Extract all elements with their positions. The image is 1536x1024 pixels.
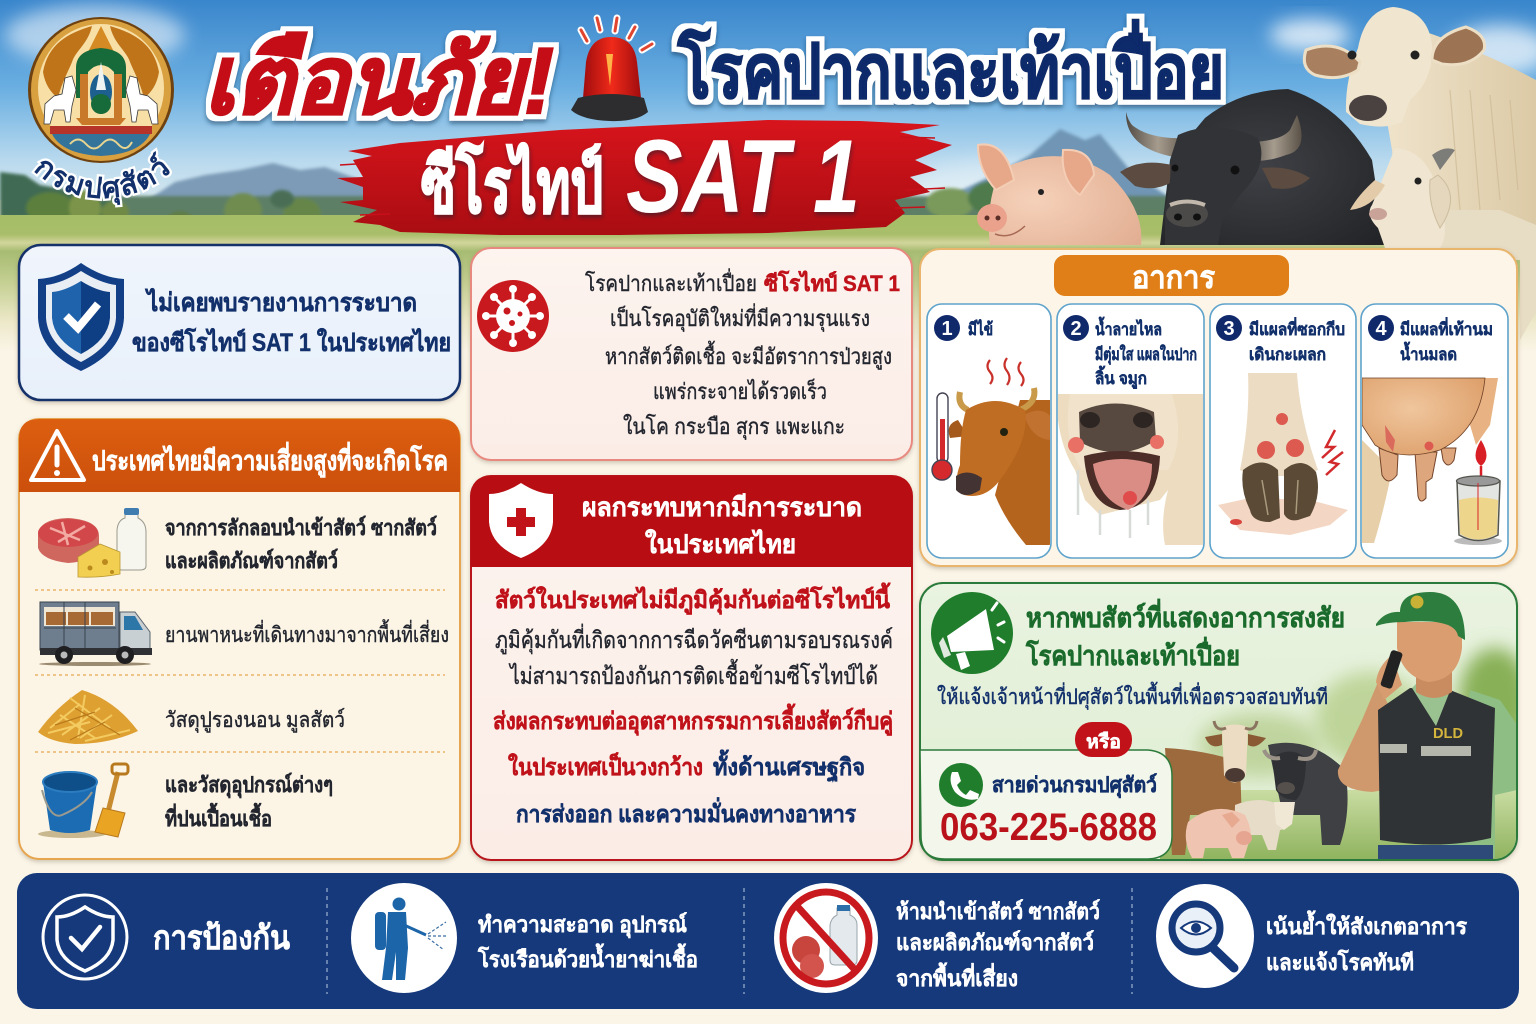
card: teat lesions and reduced milk: 4 <box>1375 318 1387 340</box>
risk header <box>19 419 460 492</box>
hotline sub-panel outline <box>920 750 1172 859</box>
text: not reported in Thailand <box>132 287 451 357</box>
icon: magnifier with eye <box>1156 884 1254 988</box>
text: bedding and manure: วัสดุปูรองนอน มูลสัตว์ <box>165 708 345 733</box>
title: warning headline <box>204 19 1224 133</box>
text: import ban <box>896 899 1100 991</box>
card: fever: มีไข้ <box>968 319 993 339</box>
icon: shield check in circle <box>43 895 127 979</box>
text: disease description <box>585 268 900 440</box>
goat <box>1350 148 1536 340</box>
icon: straw bedding <box>38 690 138 744</box>
banner text: SAT 1: SAT 1 <box>626 119 860 235</box>
card: teat lesions and reduced milk: น้ำนมลด <box>1400 341 1457 364</box>
card: salivation and mouth sores: ลิ้น จมูก <box>1095 365 1147 390</box>
title: disease name: โรคปากและเท้าเปื่อย <box>677 19 1224 113</box>
panel: report suspected animals <box>920 583 1531 860</box>
text: disease description: ในโค กระบือ สุกร แพะแกะ <box>623 414 845 440</box>
icon: virus <box>477 280 549 352</box>
impact header: ในประเทศไทย <box>645 528 796 559</box>
text: clean and disinfect: ทำความสะอาด อุปกรณ์ <box>478 912 687 939</box>
banner: red brush stroke with serotype <box>337 119 952 235</box>
text: no immunity: ไม่สามารถป้องกันการติดเชื้อข้ามซีโรไทป์ได้ <box>508 659 878 689</box>
card: teat lesions and reduced milk: มีแผลที่เท้านม <box>1400 317 1493 339</box>
cow <box>1165 721 1266 855</box>
text: disease description: หากสัตว์ติดเชื้อ จะมีอัตราการป่วยสูง <box>605 341 892 370</box>
card: hoof lesions: 3 <box>1223 318 1235 340</box>
officer on phone: DLD <box>1433 725 1463 742</box>
card: hoof lesions: เดินกะเผลก <box>1249 345 1326 364</box>
panel: symptoms <box>920 249 1517 566</box>
text: hotline label: สายด่วนกรมปศุสัตว์ <box>992 773 1157 799</box>
bottom bar: prevention <box>17 873 1519 1009</box>
text: not reported in Thailand: ของซีโรไทป์ SAT 1 ในประเทศไทย <box>132 327 451 357</box>
text: observe and report: และแจ้งโรคทันที <box>1266 949 1414 975</box>
impact header: ผลกระทบหากมีการระบาด <box>582 492 862 522</box>
text: smuggling: และผลิตภัณฑ์จากสัตว์ <box>165 548 338 573</box>
text: no immunity: สัตว์ในประเทศไม่มีภูมิคุ้มกันต่อซีโรไทป์นี้ <box>495 582 891 615</box>
text: no immunity <box>495 582 893 689</box>
text: suspected symptoms heading: โรคปากและเท้าเปื่อย <box>1025 636 1240 671</box>
pig <box>1186 809 1252 858</box>
illustration: officer and livestock in a meadow <box>1160 592 1531 860</box>
icon: blue shield with check <box>38 263 124 371</box>
text: observe and report <box>1266 910 1467 975</box>
card: hoof lesions: มีแผลที่ซอกกีบ <box>1249 317 1345 339</box>
icon: phone <box>939 763 983 807</box>
card: fever: 1 <box>941 318 953 340</box>
text: disease description: โรคปากและเท้าเปื่อย <box>585 268 757 296</box>
text: clean and disinfect <box>477 912 698 972</box>
text: import ban: ห้ามนำเข้าสัตว์ ซากสัตว์ <box>896 899 1100 924</box>
text: contaminated equipment: และวัสดุอุปกรณ์ต่างๆ <box>165 772 333 799</box>
icon: livestock truck <box>39 602 152 666</box>
card: salivation and mouth sores: มีตุ่มใส แผลในปาก <box>1095 344 1197 365</box>
buffalo <box>1264 743 1348 845</box>
title: warning headline: เตือนภัย! <box>204 28 554 133</box>
text: contaminated equipment: ที่ปนเปื้อนเชื้อ <box>165 802 272 831</box>
text: not reported in Thailand: ไม่เคยพบรายงานการระบาด <box>144 287 417 317</box>
banner text: serotype: ซีโรไทป์ <box>421 141 603 229</box>
text: no immunity: ภูมิคุ้มกันที่เกิดจากการฉีดวัคซีนตามรอบรณรงค์ <box>495 623 893 655</box>
text: vehicles: ยานพาหนะที่เดินทางมาจากพื้นที่เสี่ยง <box>165 619 449 647</box>
text: disease description: ซีโรไทป์ SAT 1 <box>764 270 900 296</box>
card: hoof lesions <box>1210 304 1356 558</box>
panel: risk factors <box>19 419 460 859</box>
text: suspected symptoms heading: หากพบสัตว์ที่แสดงอาการสงสัย <box>1026 598 1345 633</box>
panel: impact of outbreak <box>471 476 912 860</box>
white cow <box>1304 7 1536 245</box>
symptoms heading pill: อาการ <box>1132 260 1215 295</box>
impact header <box>471 476 912 567</box>
text: notify officers: ให้แจ้งเจ้าหน้าที่ปศุสัตว์ในพื้นที่เพื่อตรวจสอบทันที <box>937 682 1328 710</box>
text: import ban: และผลิตภัณฑ์จากสัตว์ <box>896 930 1094 955</box>
panel: emerging disease description <box>471 248 912 460</box>
text: hotline number: 063-225-6888 <box>940 806 1157 849</box>
icon: megaphone <box>931 592 1013 674</box>
text: observe and report: เน้นย้ำให้สังเกตอาการ <box>1266 910 1467 939</box>
text: disease description: แพร่กระจายได้รวดเร็ว <box>653 377 827 404</box>
icon: bucket and shovel <box>38 764 128 838</box>
text: import ban: จากพื้นที่เสี่ยง <box>896 962 1018 991</box>
badge: or <box>1075 722 1132 757</box>
card: fever <box>927 304 1052 558</box>
goat <box>1234 800 1295 850</box>
text: clean and disinfect: โรงเรือนด้วยน้ำยาฆ่าเชื้อ <box>477 943 698 972</box>
logo caption: กรมปศุสัตว์ <box>31 147 172 208</box>
risk header: ประเทศไทยมีความเสี่ยงสูงที่จะเกิดโรค <box>92 441 448 478</box>
officer on phone <box>1338 592 1517 859</box>
card: salivation and mouth sores: 2 <box>1070 318 1082 340</box>
text: smuggling <box>165 515 437 573</box>
card: teat lesions and reduced milk <box>1361 304 1508 558</box>
icon: red siren <box>571 18 652 121</box>
text: suspected symptoms heading <box>1025 598 1345 671</box>
panel: never reported before <box>19 245 460 400</box>
text: wide economic impact <box>493 703 893 827</box>
text: wide economic impact: ส่งผลกระทบต่ออุตสาหกรรมการเลี้ยงสัตว์กีบคู่ <box>493 703 893 736</box>
text: wide economic impact: ในประเทศเป็นวงกว้าง <box>508 752 703 780</box>
icon: no import of meat and milk <box>774 883 878 993</box>
text: smuggling: จากการลักลอบนำเข้าสัตว์ ซากสัตว์ <box>165 515 437 540</box>
card: salivation and mouth sores: น้ำลายไหล <box>1095 316 1162 339</box>
illustration: pig, buffalo, cow and goat <box>977 7 1536 340</box>
logo: Department of Livestock Development seal <box>28 17 174 208</box>
text: disease description: เป็นโรคอุบัติใหม่ที่มีความรุนแรง <box>610 303 870 332</box>
symptoms heading pill <box>1054 255 1289 296</box>
heading: prevention: การป้องกัน <box>153 919 290 956</box>
text: contaminated equipment <box>165 772 333 831</box>
water buffalo <box>1120 89 1385 245</box>
pig <box>977 144 1141 245</box>
icon: sprayer worker <box>351 883 457 993</box>
icon: meat, cheese and milk <box>38 508 146 577</box>
text: wide economic impact: ทั้งด้านเศรษฐกิจ <box>713 749 865 783</box>
card: salivation and mouth sores <box>1057 304 1204 558</box>
badge: or: หรือ <box>1086 731 1121 753</box>
text: wide economic impact: การส่งออก และความมั่นคงทางอาหาร <box>516 797 856 827</box>
